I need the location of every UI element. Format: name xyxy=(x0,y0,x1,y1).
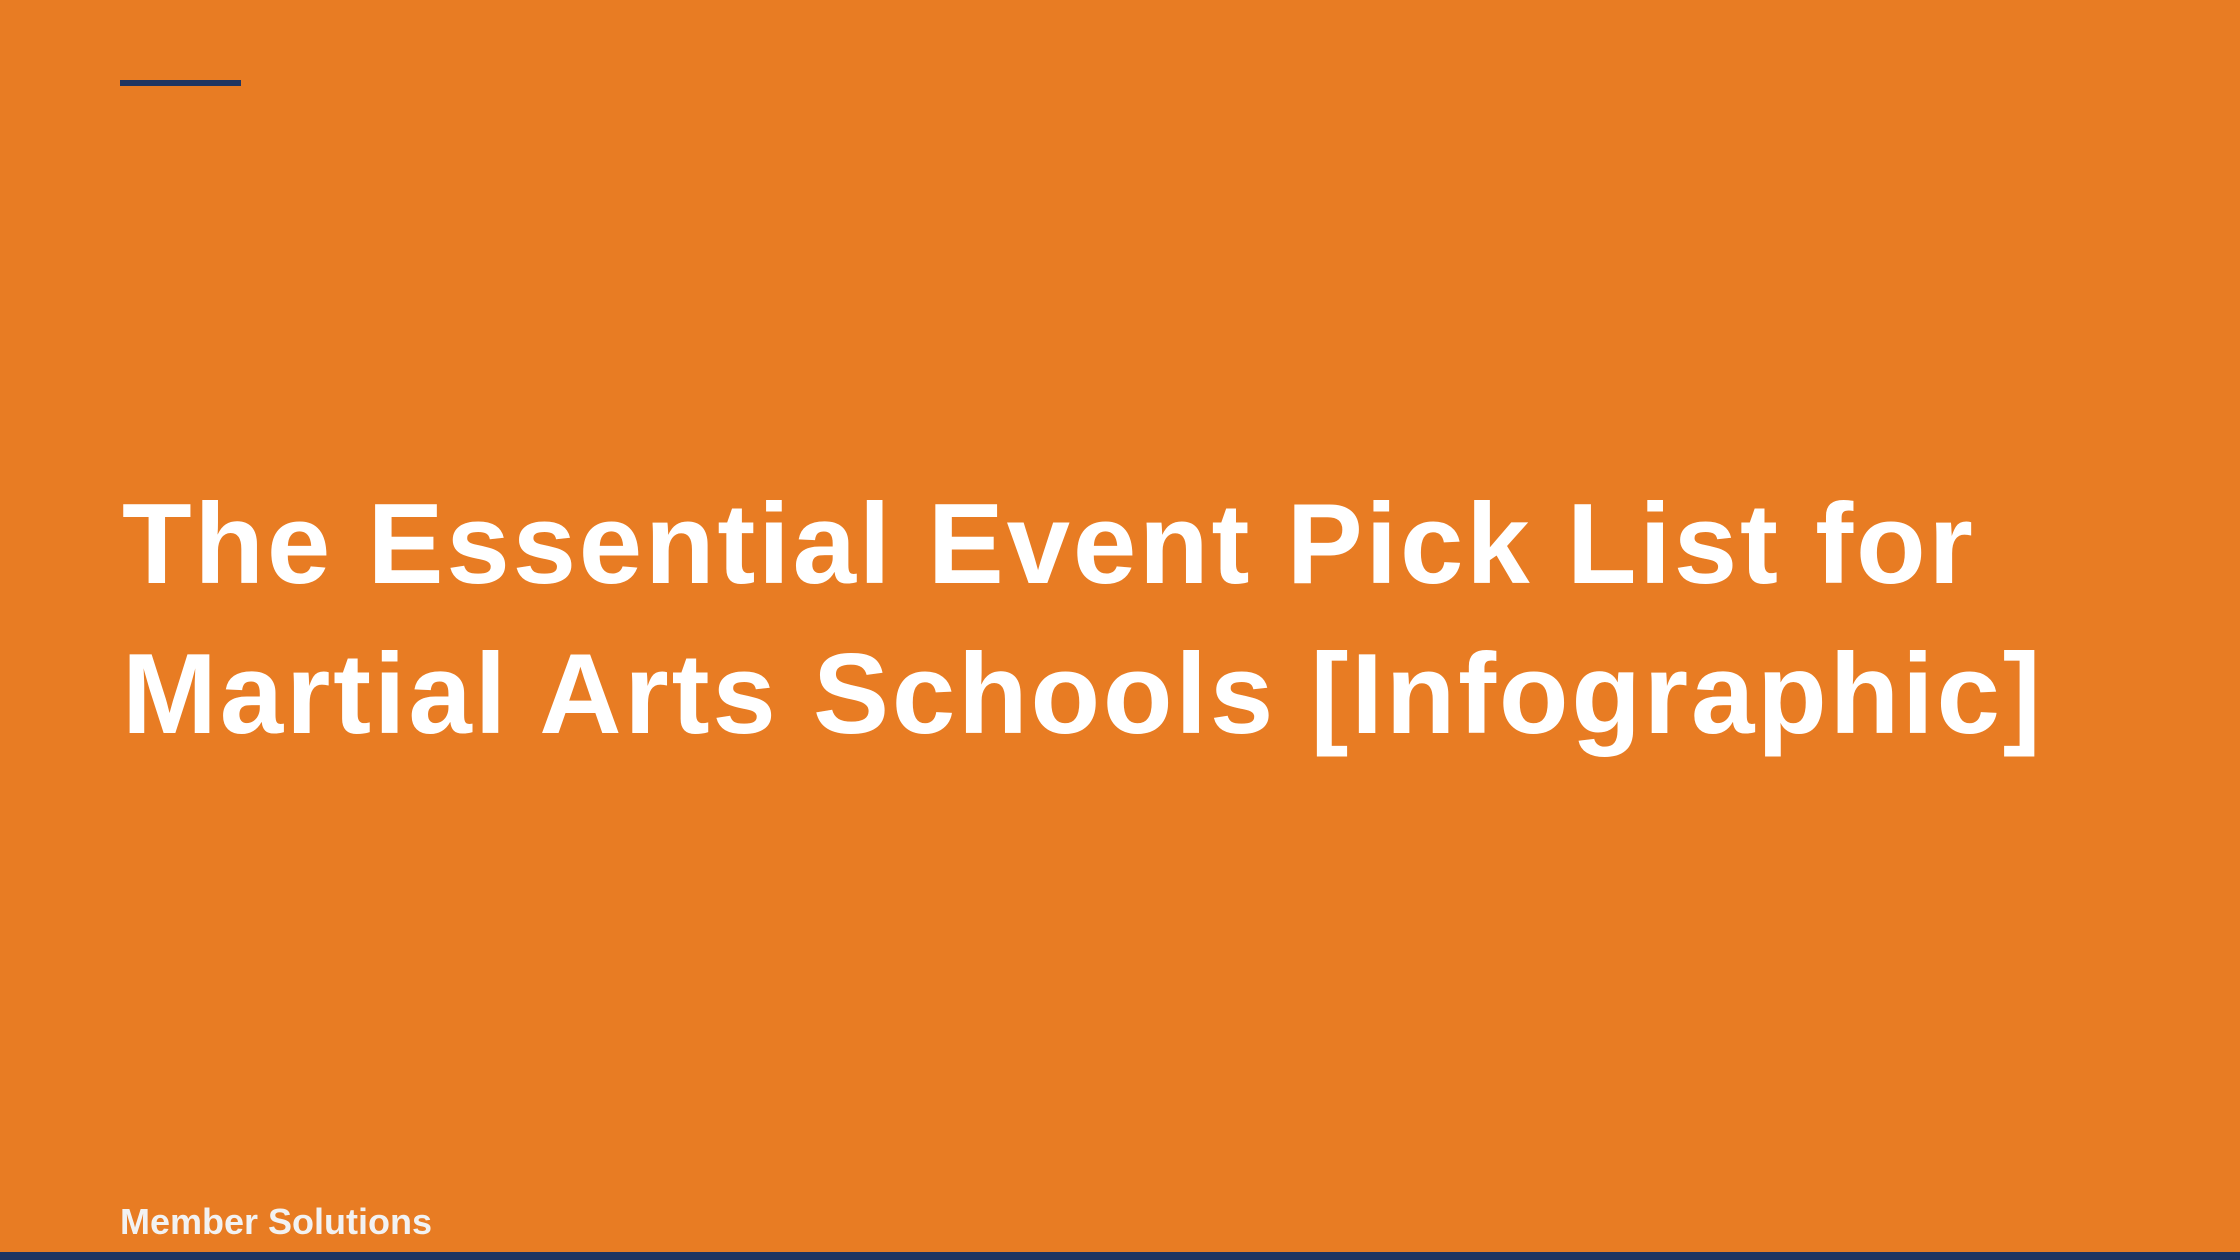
title xyxy=(122,481,2043,758)
title: The Essential Event Pick List for xyxy=(122,481,1976,608)
accent bar xyxy=(120,80,241,86)
footer: brand name: Member Solutions xyxy=(120,1201,432,1242)
title: Martial Arts Schools [Infographic] xyxy=(122,631,2043,758)
bottom navy strip xyxy=(0,1252,2240,1260)
